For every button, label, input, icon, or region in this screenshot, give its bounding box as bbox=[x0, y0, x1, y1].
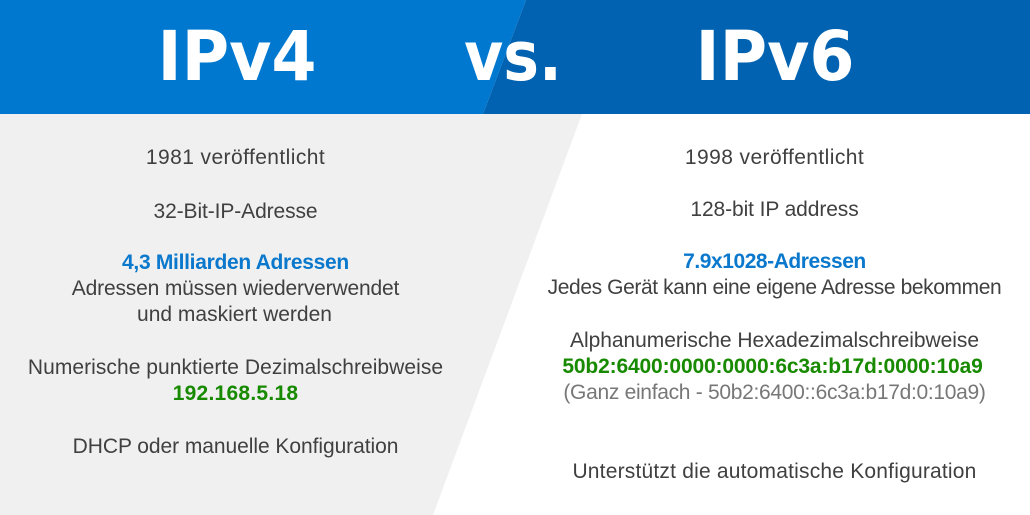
text: hexadecimal notation: Alphanumerische Hexadezimalschreibweise bbox=[570, 329, 979, 352]
panel: IPv4 details bbox=[28, 146, 443, 458]
title: IPv6: IPv6 bbox=[695, 17, 855, 97]
text: 4.3 billion addresses: 4,3 Milliarden Adressen bbox=[122, 251, 349, 274]
text: dotted decimal notation bbox=[28, 356, 443, 405]
text: 4.3 billion addresses bbox=[72, 251, 400, 326]
text: 128-bit address: 128-bit IP address bbox=[690, 198, 859, 221]
text: published 1981: 1981 veröffentlicht bbox=[146, 146, 325, 169]
text: published 1998: 1998 veröffentlicht bbox=[685, 146, 864, 169]
text: address count: Jedes Gerät kann eine eigene Adresse bekommen bbox=[548, 276, 1001, 299]
text: dotted decimal notation: Numerische punktierte Dezimalschreibweise bbox=[28, 356, 443, 379]
text: hexadecimal notation: 50b2:6400:0000:0000:6c3a:b17d:0000:10a9 bbox=[562, 355, 983, 378]
text: auto configuration: Unterstützt die automatische Konfiguration bbox=[572, 460, 977, 483]
text: address count: 7.9x1028-Adressen bbox=[683, 250, 866, 273]
panel: IPv6 details bbox=[548, 146, 1001, 483]
text: hexadecimal notation bbox=[562, 329, 986, 404]
title: IPv4: IPv4 bbox=[157, 17, 317, 97]
text: address count bbox=[548, 250, 1001, 299]
title: vs.: vs. bbox=[464, 17, 562, 97]
text: dotted decimal notation: 192.168.5.18 bbox=[173, 382, 298, 405]
text: 32-bit address: 32-Bit-IP-Adresse bbox=[153, 200, 318, 223]
text: DHCP: DHCP oder manuelle Konfiguration bbox=[73, 435, 398, 458]
text: 4.3 billion addresses: und maskiert werden bbox=[137, 303, 332, 326]
text: hexadecimal notation: (Ganz einfach - 50b2:6400::6c3a:b17d:0:10a9) bbox=[563, 381, 986, 404]
text: 4.3 billion addresses: Adressen müssen wiederverwendet bbox=[72, 277, 399, 300]
